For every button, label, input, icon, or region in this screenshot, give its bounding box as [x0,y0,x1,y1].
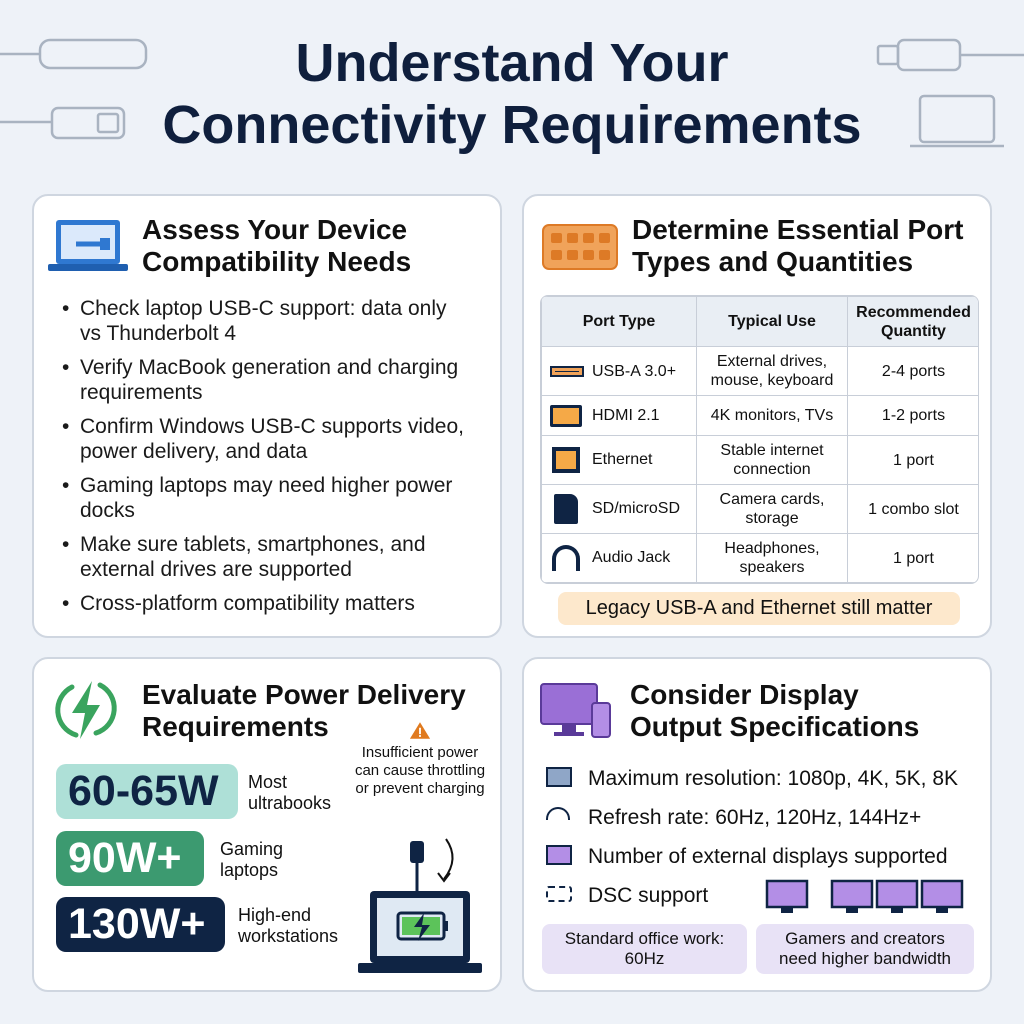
label: Most [248,772,287,792]
panel: device compatibility: Check laptop USB-C support: data only [80,297,447,320]
title: Understand Your [295,33,729,93]
spec list: DSC support [588,884,708,907]
heading: Compatibility Needs [142,246,411,277]
pill: 60-65W: 60-65W [68,767,219,815]
port table: Port Type [583,313,655,330]
panel: power delivery: laptops [220,860,278,880]
panel: power delivery: High-end [238,905,311,925]
spec list: Refresh rate: 60Hz, 120Hz, 144Hz+ [588,806,921,829]
title [162,33,862,155]
panel: device compatibility: Cross-platform compatibility matters [80,592,415,615]
callout: legacy: Legacy USB-A and Ethernet still matter [586,597,932,619]
heading [142,214,411,277]
port table: speakers [740,559,804,576]
warning callout: can cause throttling [355,762,485,779]
illustration: laptop charging [358,838,482,973]
heading: Output Specifications [630,711,919,742]
port table: SD/microSD [592,500,680,517]
icon: laptop [48,220,128,271]
decoration: cables right and laptop [876,38,1024,148]
heading: Consider Display [630,679,859,710]
port table: 1 port [893,550,934,566]
port table: 1 combo slot [868,500,959,518]
warning callout [355,722,485,797]
port table: HDMI 2.1 [592,407,660,424]
pill: 90W+ [56,831,204,886]
heading: Determine Essential Port [632,214,963,245]
label [248,772,331,813]
illustration: monitors [766,880,964,913]
panel: device compatibility: Confirm Windows USB-C supports video, power delivery, and data [80,415,464,463]
callout: office [542,924,747,974]
port table: storage [745,510,799,527]
heading [632,214,964,277]
panel: power delivery: workstations [238,926,338,946]
port table: 4K monitors, TVs [711,407,833,424]
panel: display output [522,657,992,992]
callout: legacy [558,592,960,625]
heading: Assess Your Device [142,214,407,245]
heading: Types and Quantities [632,246,913,277]
heading [142,679,466,742]
panel: device compatibility: Make sure tablets, smartphones, and external drives are supported [80,533,426,581]
port table: 2-4 ports [882,362,945,380]
port table: 1-2 ports [882,407,945,424]
warning callout: Insufficient power [362,744,478,761]
decoration: cables left [0,38,148,140]
panel: device compatibility: Gaming laptops may need higher power docks [80,474,452,522]
spec list: Maximum resolution: 1080p, 4K, 5K, 8K [588,767,958,790]
label: ultrabooks [248,793,331,813]
spec list [546,767,958,907]
callout: gamers: need higher bandwidth [779,949,951,968]
callout: office: 60Hz [625,949,664,968]
port table: 1 port [893,452,934,468]
port table: External drives, [717,353,827,370]
pill: 130W+: 130W+ [68,900,205,948]
heading: Evaluate Power Delivery [142,679,466,710]
pill: 90W+: 90W+ [68,834,182,882]
port table: mouse, keyboard [711,372,833,389]
port table: connection [733,461,811,478]
port table: USB-A 3.0+ [592,362,676,380]
port table: Typical Use [728,313,816,330]
icon: power bolt [55,681,117,739]
panel: device compatibility: Verify MacBook generation and charging requirements [80,356,458,404]
bullet list [62,297,464,615]
panel: device compatibility: vs Thunderbolt 4 [80,322,236,345]
panel: power delivery [32,657,502,992]
heading [630,679,919,742]
port table [540,295,979,584]
title: Connectivity Requirements [162,95,862,155]
callout: gamers [756,924,974,974]
panel: port types [522,194,992,638]
port table: Recommended [856,304,971,320]
icon: monitor and phone [540,683,611,738]
spec list: Number of external displays supported [588,845,948,868]
port table: Quantity [881,322,946,340]
callout: office: Standard office work: [565,929,724,948]
port table: Stable internet [720,442,824,459]
icon: port hub [542,224,618,270]
port table: Headphones, [724,540,820,557]
warning callout: or prevent charging [355,780,485,797]
heading: Requirements [142,711,329,742]
panel: device compatibility [32,194,502,638]
panel: power delivery: Gaming [220,839,283,859]
port table: Audio Jack [592,549,670,566]
port table: Camera cards, [720,491,824,508]
port table: Ethernet [592,451,652,468]
callout: gamers: Gamers and creators [785,929,945,948]
